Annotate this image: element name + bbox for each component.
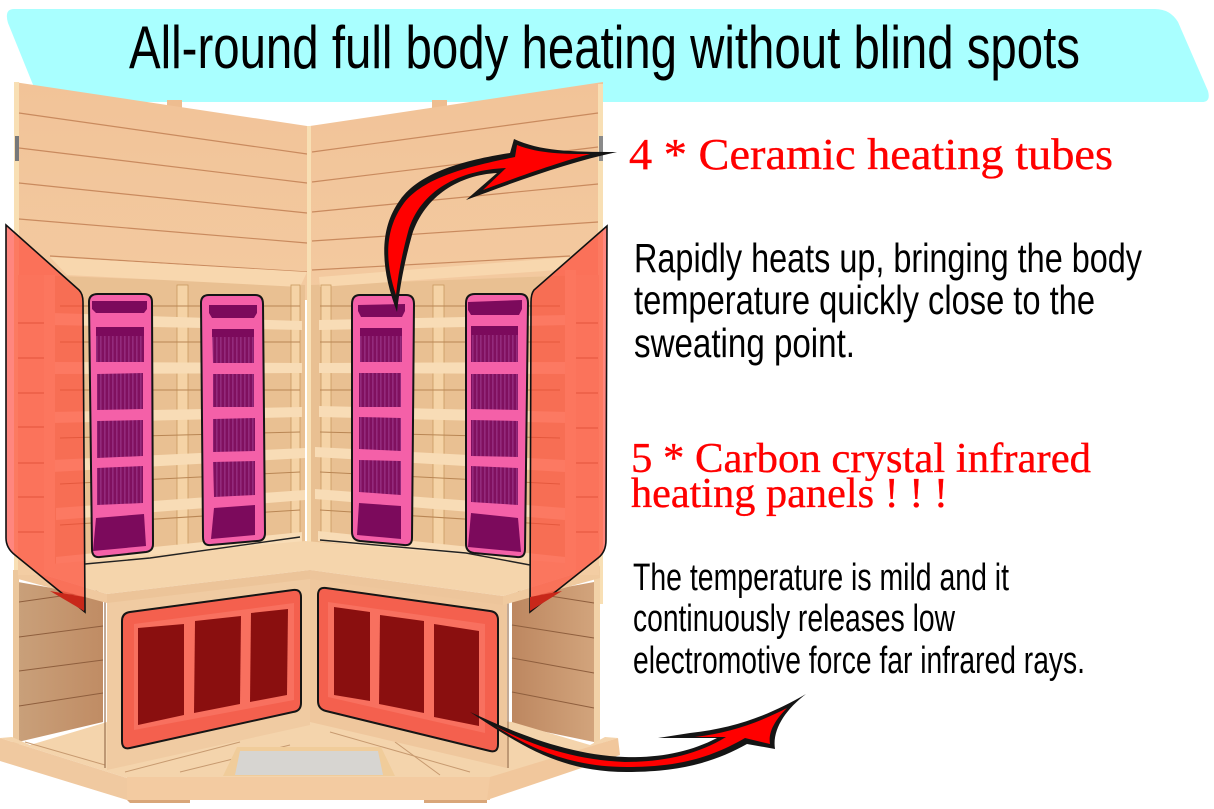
- text: ceramic description: [634, 235, 1142, 366]
- text: carbon description: continuously releases low: [633, 598, 955, 640]
- banner: [7, 9, 1209, 102]
- heading: carbon crystal panels: heating panels ! ! !: [631, 471, 948, 517]
- right upper wall: [310, 82, 603, 604]
- text: ceramic description: sweating point.: [634, 320, 855, 366]
- lower back wall left: [30, 257, 307, 575]
- heading: ceramic heating tubes: 4 * Ceramic heating tubes: [629, 130, 1113, 179]
- ceramic heating tube 4: [466, 294, 528, 557]
- ceramic heating tube 3: [352, 295, 414, 545]
- bench seat: [18, 541, 600, 605]
- heading: carbon crystal panels: 5 * Carbon crystal infrared: [631, 436, 1091, 482]
- arrow from carbon panel: [470, 694, 806, 772]
- right door wood: [565, 270, 599, 575]
- ceramic heating tube 1: [89, 294, 153, 557]
- floor mat: [223, 747, 395, 776]
- left heating door overlay: [6, 225, 300, 612]
- right lower front face: [310, 570, 508, 768]
- left upper wall: [14, 82, 307, 602]
- arrow to ceramic heading: [384, 139, 617, 312]
- centre post: [307, 126, 311, 566]
- floor and base platform: [0, 700, 620, 803]
- text: carbon description: [633, 557, 1085, 682]
- heading: carbon crystal panels: [631, 436, 1091, 517]
- ceramic heating tube 2: [201, 295, 265, 545]
- text: ceramic description: temperature quickly close to the: [634, 277, 1095, 323]
- right heating door overlay: [320, 226, 607, 612]
- carbon crystal panel right: [318, 588, 498, 751]
- under-seat right cavity: [512, 570, 600, 745]
- carbon crystal panel left: [122, 590, 301, 748]
- lower back wall right: [311, 257, 585, 575]
- sauna illustration: [0, 82, 620, 803]
- under-seat left cavity: [13, 570, 103, 745]
- text: carbon description: The temperature is mild and it: [633, 557, 1009, 599]
- left door wood: [18, 275, 55, 575]
- left lower front face: [105, 570, 310, 770]
